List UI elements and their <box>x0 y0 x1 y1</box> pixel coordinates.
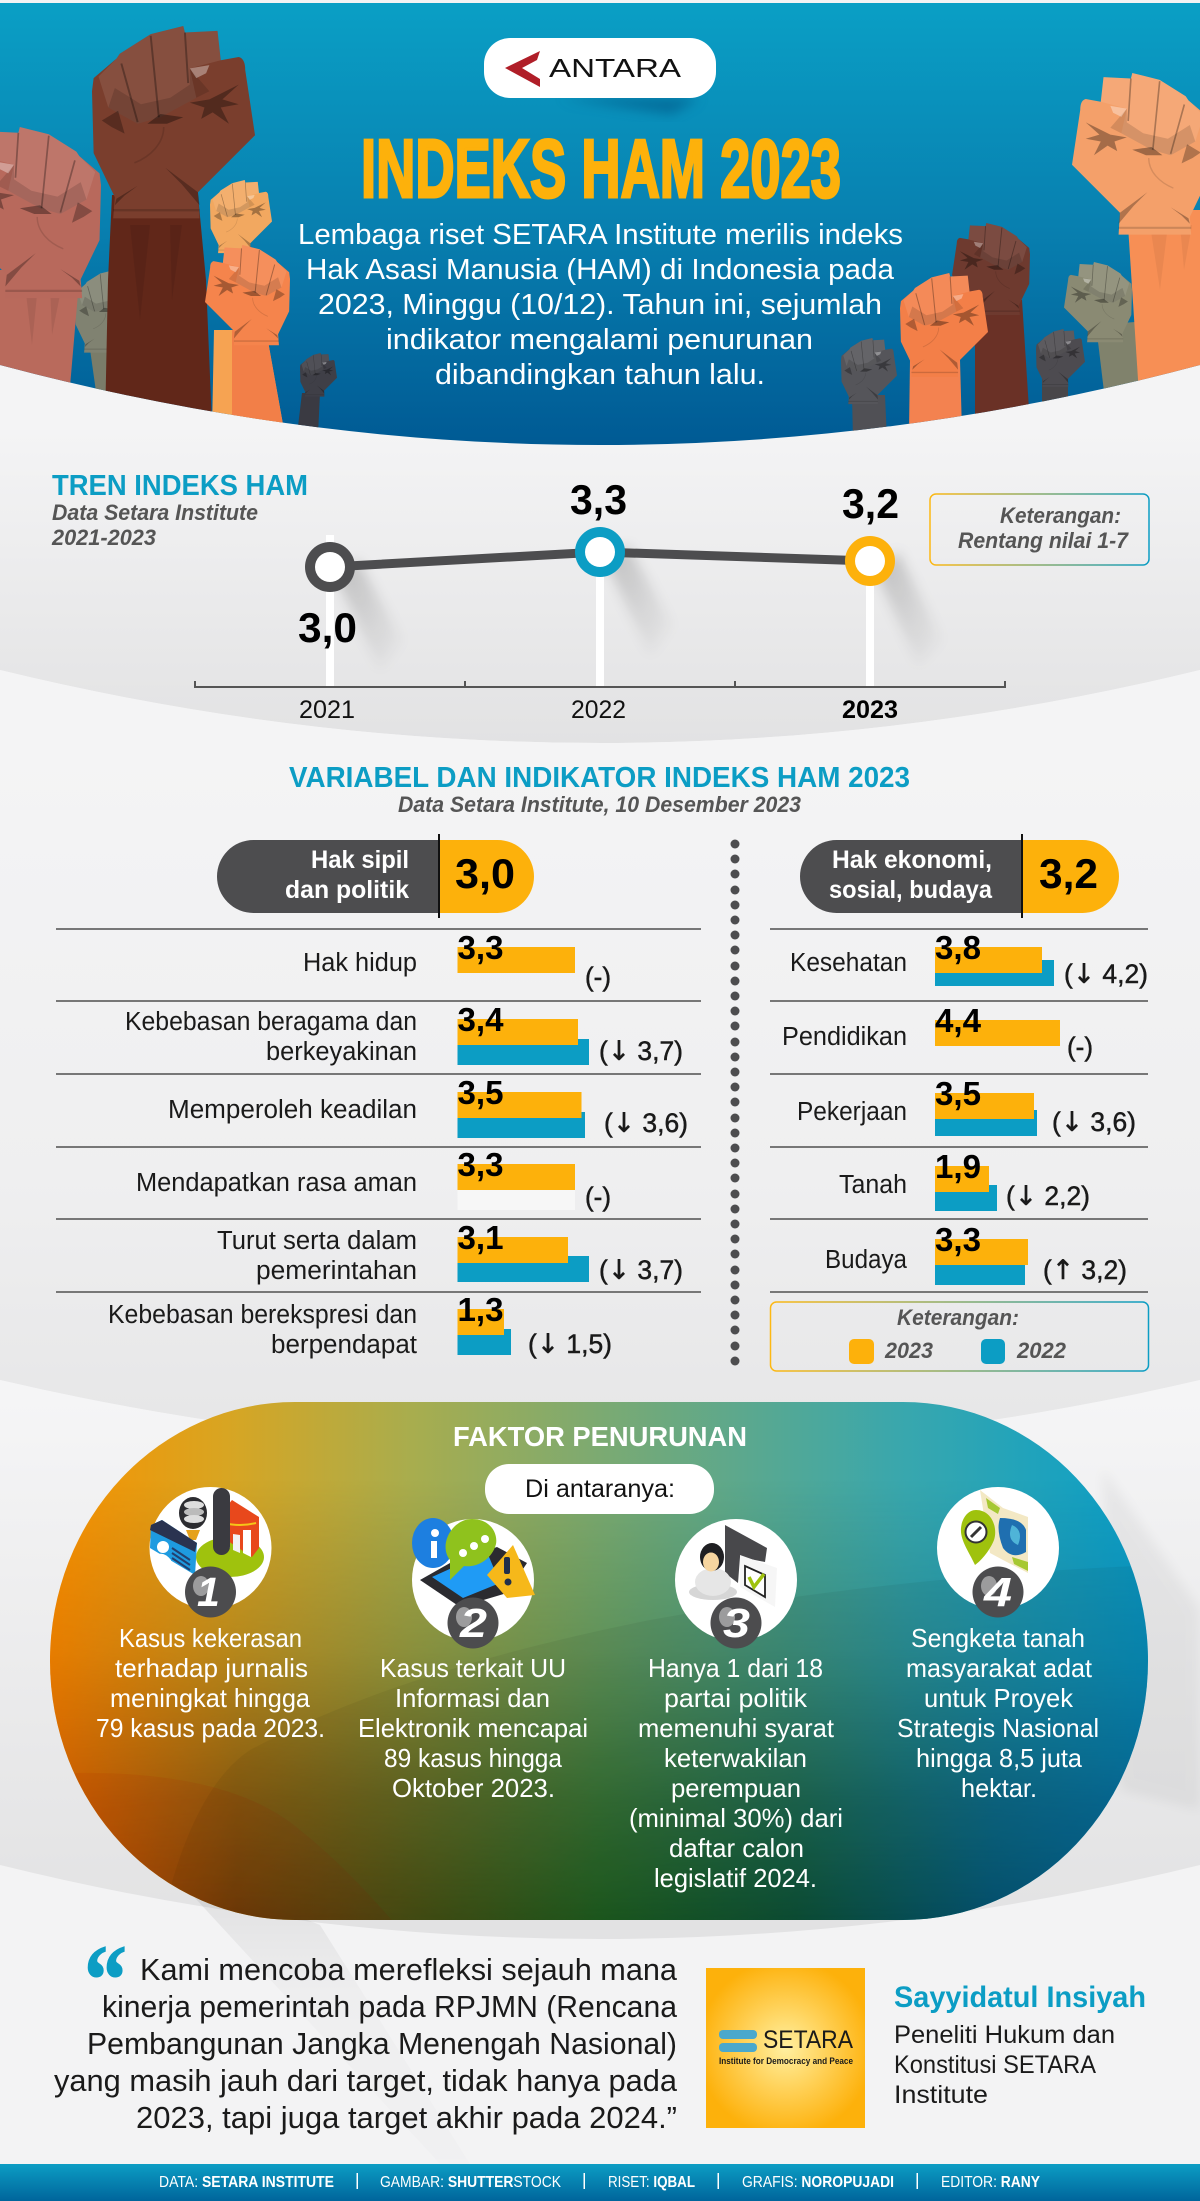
text: factor 4: hingga 8,5 juta <box>916 1743 1083 1773</box>
heading: faktor penurunan: FAKTOR PENURUNAN <box>453 1421 747 1452</box>
row: Kesehatan: 3,8 <box>935 929 981 966</box>
row: Pendidikan: 4,4 <box>935 1002 982 1039</box>
pill: economic, social, cultural rights: sosial, budaya <box>829 876 993 904</box>
text: factor 1 <box>96 1623 325 1743</box>
row: Mendapatkan rasa aman <box>136 1146 611 1212</box>
table: right indicators <box>770 929 1148 1292</box>
heading: tren indeks HAM <box>51 470 308 550</box>
source note <box>51 500 258 550</box>
number badge 1 <box>185 1566 236 1618</box>
text: factor 1: meningkat hingga <box>110 1683 311 1713</box>
speaker credit: Sayyidatul Insiyah <box>894 1981 1146 2014</box>
fist: dark gray right <box>841 338 897 440</box>
footer credits: EDITOR: RANY <box>941 2174 1040 2191</box>
value labels: 3,0 <box>298 604 357 651</box>
table: left indicators <box>56 929 701 1360</box>
icon: phone and messages <box>412 1518 535 1641</box>
row: Mendapatkan rasa aman: (-) <box>585 1182 611 1212</box>
row: Memperoleh keadilan <box>168 1074 688 1139</box>
factor 3 <box>629 1519 843 1893</box>
row: Memperoleh keadilan: Memperoleh keadilan <box>168 1096 417 1124</box>
number badge 2: 2 <box>459 1600 487 1646</box>
quote text: kinerja pemerintah pada RPJMN (Rencana <box>102 1989 678 2024</box>
row: Kesehatan: (↓ 4,2) <box>1064 959 1148 990</box>
fist: dark small left <box>298 353 337 428</box>
row: Budaya: 3,3 <box>935 1221 981 1258</box>
background band: variables <box>0 670 1200 1450</box>
quote text: Kami mencoba merefleksi sejauh mana <box>140 1952 678 1987</box>
text: factor 3: daftar calon <box>669 1833 804 1863</box>
text: factor 3: legislatif 2024. <box>654 1863 817 1893</box>
text: factor 2: Kasus terkait UU <box>380 1653 566 1683</box>
heading: tren indeks HAM: TREN INDEKS HAM <box>52 470 308 502</box>
row: Kebebasan beragama <box>125 1001 683 1067</box>
factor 1 <box>96 1487 325 1743</box>
point shadows <box>335 545 942 670</box>
row: Budaya: (↑ 3,2) <box>1043 1255 1127 1286</box>
speaker credit: Institute <box>894 2081 988 2109</box>
fist: large dark brown <box>92 26 255 425</box>
icon: map and pin <box>937 1487 1059 1609</box>
row: Budaya: Budaya <box>825 1246 908 1274</box>
quote text: yang masih jauh dari target, tidak hanya pada <box>54 2063 678 2098</box>
row: Hak hidup: Hak hidup <box>303 949 417 977</box>
text: factor 3: memenuhi syarat <box>638 1713 835 1743</box>
legend: value range: Rentang nilai 1-7 <box>958 528 1130 553</box>
text: factor 3: (minimal 30%) dari <box>629 1803 843 1833</box>
background band: index trend <box>0 300 1200 743</box>
drop lines <box>326 535 334 687</box>
text: factor 3: keterwakilan <box>664 1743 807 1773</box>
row: Turut serta dalam pemerintahan: (↓ 3,7) <box>599 1255 683 1286</box>
row: Pendidikan <box>782 1002 1093 1062</box>
intro text: Lembaga riset SETARA Institute merilis indeks <box>298 219 903 251</box>
intro text: Hak Asasi Manusia (HAM) di Indonesia pada <box>306 254 895 286</box>
row: Memperoleh keadilan: 3,5 <box>458 1074 504 1111</box>
row: Hak hidup: 3,3 <box>458 929 504 966</box>
footer credits: DATA: SETARA INSTITUTE <box>159 2174 334 2191</box>
factor 2 <box>358 1518 588 1803</box>
row: Pekerjaan: (↓ 3,6) <box>1052 1107 1136 1138</box>
line chart: trend 2021-2023: 3,3 <box>570 476 627 523</box>
source note: Data Setara Institute <box>52 500 258 525</box>
point 2023 <box>845 536 895 586</box>
text: factor 4: Sengketa tanah <box>911 1623 1085 1653</box>
fist: dark brown right <box>952 223 1030 425</box>
row: Turut serta dalam pemerintahan <box>217 1219 683 1286</box>
row: Turut serta dalam pemerintahan: 3,1 <box>458 1219 504 1256</box>
footer credits <box>0 2164 1200 2201</box>
title: INDEKS HAM 2023 <box>361 122 841 215</box>
trend line <box>330 552 870 567</box>
row: Kebebasan berekspresi: Kebebasan berekspresi dan <box>108 1301 417 1329</box>
logo: SETARA: Institute for Democracy and Peace <box>719 2056 853 2067</box>
text: factor 4: masyarakat adat <box>906 1653 1093 1683</box>
speaker credit: Peneliti Hukum dan <box>894 2021 1115 2049</box>
row: Pekerjaan: Pekerjaan <box>797 1098 907 1126</box>
number badge 3 <box>710 1598 762 1648</box>
number badge 4 <box>972 1566 1024 1618</box>
pill: civil and political rights: 3,0 <box>455 850 515 897</box>
fist: dark small right <box>1036 329 1085 410</box>
fists illustration: right <box>841 73 1200 440</box>
row: Tanah <box>839 1148 1090 1212</box>
logo: ANTARA: ANTARA <box>549 53 682 83</box>
row: Kebebasan beragama: Kebebasan beragama dan <box>125 1008 417 1036</box>
row: Budaya <box>825 1221 1127 1286</box>
number badge 2 <box>448 1598 498 1648</box>
quote text: 2023, tapi juga target akhir pada 2024.” <box>136 2100 677 2135</box>
logo: ANTARA <box>484 38 716 114</box>
legend: value range: Keterangan: <box>1000 503 1121 528</box>
line chart: trend 2021-2023: 2022 <box>571 696 626 724</box>
header panel <box>0 3 1200 445</box>
text: factor 4: untuk Proyek <box>924 1683 1074 1713</box>
row: Kebebasan berekspresi: (↓ 1,5) <box>528 1329 612 1360</box>
fist: orange upper <box>210 180 272 253</box>
fist: orange front <box>205 245 290 430</box>
legend: 2023 and 2022: 2023 <box>884 1338 933 1363</box>
point 2022 <box>575 527 625 577</box>
pill: civil and political rights: Hak sipil <box>311 846 409 874</box>
row: Pendidikan: Pendidikan <box>782 1023 907 1051</box>
row: Turut serta dalam pemerintahan: pemerintahan <box>256 1257 417 1285</box>
icon: antara chevron <box>505 51 540 87</box>
icon: quotation mark: “ <box>84 1924 127 2035</box>
icon: woman and ballot <box>675 1519 797 1641</box>
row: Tanah: (↓ 2,2) <box>1006 1181 1090 1212</box>
text: factor 1: 79 kasus pada 2023. <box>96 1713 325 1743</box>
dotted divider <box>730 840 740 1366</box>
text: factor 3: perempuan <box>671 1773 801 1803</box>
row: Kesehatan <box>790 929 1148 990</box>
pill: economic, social, cultural rights: Hak ekonomi, <box>832 846 992 874</box>
logo: SETARA: SETARA <box>763 2026 853 2054</box>
pill: di antaranya: Di antaranya: <box>525 1475 675 1503</box>
legend: value range <box>930 494 1149 565</box>
fist: salmon left <box>0 127 101 410</box>
year labels: 2021 <box>299 696 355 724</box>
line chart: trend 2021-2023: 3,2 <box>842 480 899 527</box>
row: Mendapatkan rasa aman: 3,3 <box>458 1146 504 1183</box>
row: Mendapatkan rasa aman: Mendapatkan rasa aman <box>136 1169 417 1197</box>
text: factor 3 <box>629 1653 843 1893</box>
number badge 1: 1 <box>197 1569 220 1615</box>
row: Turut serta dalam pemerintahan: Turut serta dalam <box>217 1227 417 1255</box>
row: Kesehatan: Kesehatan <box>790 949 907 977</box>
quote text: Pembangunan Jangka Menengah Nasional) <box>87 2026 677 2061</box>
fist: orange right <box>900 273 988 432</box>
fist: peach large <box>1072 73 1200 410</box>
row: Kebebasan beragama: (↓ 3,7) <box>599 1036 683 1067</box>
row: Pekerjaan <box>797 1075 1136 1138</box>
speaker credit <box>894 1981 1146 2109</box>
legend: 2023 and 2022: Keterangan: <box>897 1305 1019 1330</box>
source note: 2021-2023 <box>51 525 156 550</box>
axis <box>195 681 1005 687</box>
text: factor 1: terhadap jurnalis <box>115 1653 308 1683</box>
pill: economic, social, cultural rights <box>800 834 1119 918</box>
factor 4 <box>897 1487 1099 1803</box>
quote text <box>54 1952 678 2135</box>
background band: factors <box>0 1380 1200 1939</box>
panel: faktor penurunan <box>40 1402 1160 1930</box>
text: factor 4: Strategis Nasional <box>897 1713 1099 1743</box>
row: Memperoleh keadilan: (↓ 3,6) <box>604 1108 688 1139</box>
pill: di antaranya <box>485 1464 714 1514</box>
row: Kebebasan berekspresi: 1,3 <box>458 1291 504 1328</box>
text: factor 2: Informasi dan <box>395 1683 550 1713</box>
number badge 4: 4 <box>983 1569 1012 1615</box>
legend: 2023 and 2022: 2022 <box>1016 1338 1067 1363</box>
footer credits: RISET: IQBAL <box>608 2174 695 2191</box>
footer credits: GAMBAR: SHUTTERSTOCK <box>380 2174 561 2191</box>
intro text: dibandingkan tahun lalu. <box>435 359 765 391</box>
fists illustration: left <box>0 26 337 435</box>
row: Pendidikan: (-) <box>1067 1032 1093 1062</box>
text: factor 3: Hanya 1 dari 18 <box>648 1653 823 1683</box>
row: Pekerjaan: 3,5 <box>935 1075 981 1112</box>
row: Kebebasan beragama: 3,4 <box>458 1001 504 1038</box>
heading: variables and indicators <box>289 762 910 817</box>
row: Hak hidup: (-) <box>585 962 611 992</box>
point 2021 <box>305 542 355 592</box>
text: factor 4: hektar. <box>961 1773 1037 1803</box>
intro text: indikator mengalami penurunan <box>386 324 813 356</box>
text: factor 1: Kasus kekerasan <box>119 1623 302 1653</box>
fist: olive right <box>1064 262 1142 400</box>
intro text: 2023, Minggu (10/12). Tahun ini, sejumlah <box>318 289 882 321</box>
row: Kebebasan beragama: berkeyakinan <box>266 1038 417 1066</box>
row: Tanah: 1,9 <box>935 1148 981 1185</box>
heading: variables and indicators: VARIABEL DAN INDIKATOR INDEKS HAM 2023 <box>289 762 910 794</box>
text: factor 2: Elektronik mencapai <box>358 1713 588 1743</box>
footer credits: GRAFIS: NOROPUJADI <box>742 2174 894 2191</box>
row: Kebebasan berekspresi <box>108 1291 612 1360</box>
speaker credit: Konstitusi SETARA <box>894 2051 1096 2079</box>
intro text <box>298 219 903 391</box>
text: factor 2: 89 kasus hingga <box>384 1743 562 1773</box>
logo: SETARA <box>706 1968 865 2128</box>
pill: civil and political rights <box>217 834 534 918</box>
row: Tanah: Tanah <box>839 1171 907 1199</box>
row: Hak hidup <box>303 929 611 992</box>
number badge 3: 3 <box>723 1600 750 1646</box>
text: factor 3: partai politik <box>664 1683 808 1713</box>
legend: 2023 and 2022 <box>770 1302 1148 1371</box>
icon: data and press card <box>150 1487 272 1609</box>
row: Kebebasan berekspresi: berpendapat <box>271 1331 417 1359</box>
heading: variables and indicators: Data Setara Institute, 10 Desember 2023 <box>398 792 801 817</box>
line chart: trend 2021-2023: 2023 <box>842 696 898 724</box>
text: factor 4 <box>897 1623 1099 1803</box>
pill: civil and political rights: dan politik <box>285 876 409 904</box>
text: factor 2 <box>358 1653 588 1803</box>
long shadow behind panel <box>160 1467 1200 2164</box>
fist: olive small left <box>76 272 115 393</box>
text: factor 2: Oktober 2023. <box>392 1773 555 1803</box>
line chart: trend 2021-2023 <box>195 476 1005 724</box>
pill: economic, social, cultural rights: 3,2 <box>1039 850 1098 897</box>
